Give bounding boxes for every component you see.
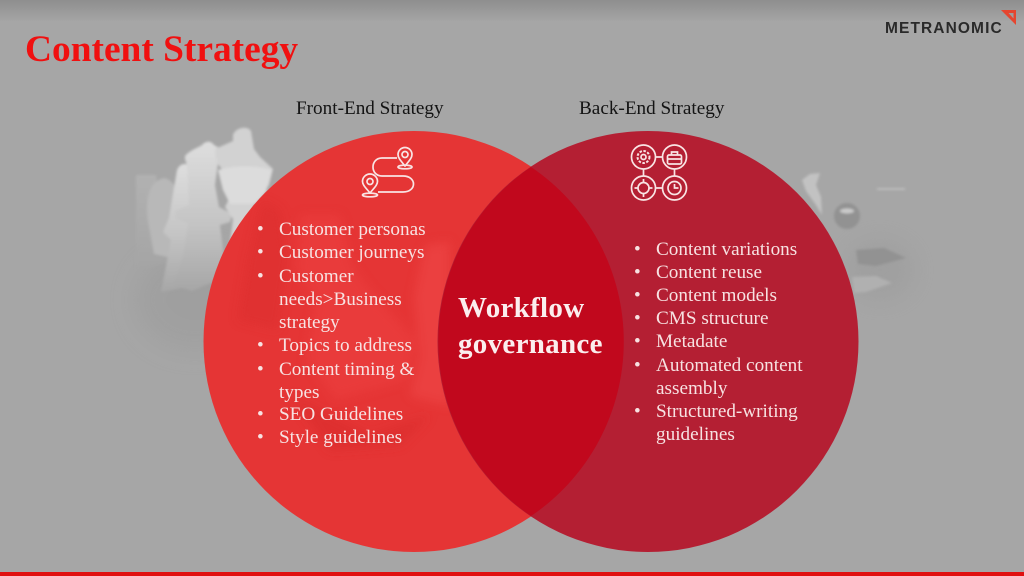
list: back-end items: • — [634, 355, 641, 376]
list: front-end items: types — [279, 382, 320, 403]
list: front-end items: Content timing & — [279, 359, 414, 380]
overlap label — [458, 292, 603, 360]
heading: front-end strategy: Front-End Strategy — [296, 98, 444, 119]
icon: four gears and tools — [632, 145, 686, 200]
list: front-end items: • — [257, 335, 264, 356]
list: front-end items: Topics to address — [279, 335, 412, 356]
list: back-end items: Structured-writing — [656, 401, 798, 422]
heading: back-end strategy: Back-End Strategy — [579, 98, 724, 119]
list: front-end items: • — [257, 266, 264, 287]
list: front-end items: strategy — [279, 312, 340, 333]
list: back-end items: Automated content — [656, 355, 803, 376]
list: front-end items: • — [257, 219, 264, 240]
overlap label: governance — [458, 328, 603, 360]
circle: back-end strategy — [438, 131, 858, 552]
list: front-end items — [257, 219, 426, 448]
list: back-end items: assembly — [656, 378, 727, 399]
circle: front-end strategy — [204, 131, 624, 552]
icon: metranomic logo mark — [1001, 10, 1016, 25]
list: back-end items: • — [634, 262, 641, 283]
list: front-end items: • — [257, 242, 264, 263]
list: back-end items: Content variations — [656, 239, 797, 260]
list: back-end items: Content reuse — [656, 262, 762, 283]
title: Content Strategy — [25, 29, 298, 70]
list: back-end items: guidelines — [656, 424, 735, 445]
list: back-end items: • — [634, 239, 641, 260]
list: front-end items: • — [257, 359, 264, 380]
list: back-end items: CMS structure — [656, 308, 768, 329]
overlap label: Workflow — [458, 292, 584, 324]
logo wordmark: METRANOMIC — [885, 20, 1003, 37]
faint chess pieces through left circle — [416, 246, 446, 400]
list: back-end items: • — [634, 401, 641, 422]
chess pieces left — [135, 128, 273, 350]
list: front-end items: Customer journeys — [279, 242, 424, 263]
list: front-end items: • — [257, 427, 264, 448]
list: back-end items: • — [634, 308, 641, 329]
bottom red bar — [0, 572, 1024, 576]
list: front-end items: Customer personas — [279, 219, 426, 240]
list: back-end items: Metadate — [656, 331, 727, 352]
list: front-end items: needs>Business — [279, 289, 402, 310]
list: front-end items: Customer — [279, 266, 354, 287]
list: front-end items: • — [257, 404, 264, 425]
list: front-end items: SEO Guidelines — [279, 404, 403, 425]
list: back-end items — [634, 239, 803, 445]
chess pieces right — [802, 173, 914, 300]
list: back-end items: Content models — [656, 285, 777, 306]
list: front-end items: Style guidelines — [279, 427, 402, 448]
list: back-end items: • — [634, 285, 641, 306]
list: back-end items: • — [634, 331, 641, 352]
overlap: workflow governance — [438, 167, 624, 516]
icon: route with map pins — [362, 148, 414, 197]
